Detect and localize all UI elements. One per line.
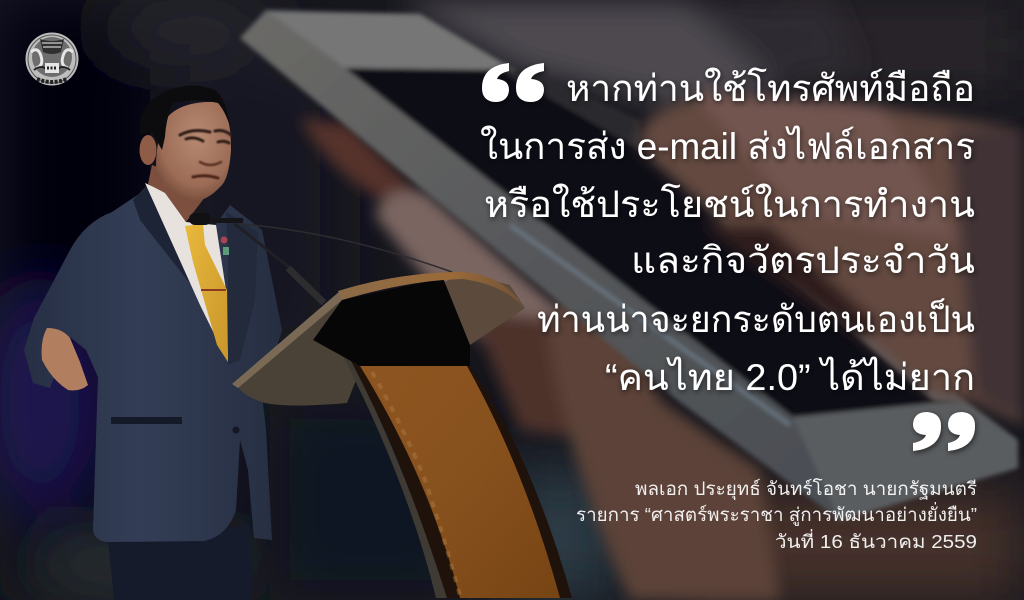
eyes, nose and mouth — [180, 130, 231, 178]
government seal logo — [26, 32, 78, 86]
tie clip — [201, 289, 226, 291]
attribution: รายการ “ศาสตร์พระราชา สู่การพัฒนาอย่างยั่งยืน” — [576, 502, 977, 526]
fingers over the phone — [640, 90, 1024, 425]
speaker figure in suit — [24, 85, 282, 600]
hand behind the phone — [300, 118, 780, 600]
smartphone — [240, 10, 1018, 520]
main quote: ท่านน่าจะยกระดับตนเองเป็น — [537, 296, 975, 340]
main quote: หรือใช้ประโยชน์ในการทำงาน — [484, 183, 975, 225]
lectern top rim — [338, 272, 525, 309]
attribution: พลเอก ประยุทธ์ จันทร์โอชา นายกรัฐมนตรี — [635, 478, 977, 501]
main quote: ในการส่ง e-mail ส่งไฟล์เอกสาร — [480, 125, 975, 167]
upper hand haze behind the phone — [395, 0, 860, 110]
left hand — [42, 328, 88, 390]
lectern black top — [313, 278, 470, 366]
attribution — [576, 478, 977, 552]
podium column — [325, 322, 572, 598]
hair — [140, 85, 231, 150]
yellow striped tie — [185, 224, 228, 362]
main quote: หากท่านใช้โทรศัพท์มือถือ — [566, 67, 975, 109]
lectern left rim — [232, 291, 342, 388]
attribution: วันที่ 16 ธันวาคม 2559 — [775, 529, 977, 552]
column wood panel — [360, 366, 560, 598]
lapel pins — [220, 236, 229, 255]
wooden podium — [232, 272, 572, 598]
carved ornament — [372, 372, 460, 596]
neck — [148, 165, 205, 222]
suit jacket — [24, 190, 282, 542]
microphones — [189, 213, 452, 303]
column grey edge — [325, 322, 447, 598]
shirt — [145, 183, 228, 362]
closing quotation mark — [913, 412, 975, 451]
trousers — [108, 525, 252, 600]
face — [156, 102, 231, 201]
lectern top right wing — [443, 273, 525, 345]
ear — [140, 135, 156, 165]
main quote: และกิจวัตรประจำวัน — [631, 240, 975, 281]
main quote: “คนไทย 2.0” ได้ไม่ยาก — [605, 356, 975, 398]
opening quotation mark — [482, 63, 544, 102]
suit details: lapel, pocket and button — [111, 186, 258, 434]
podium underside bowl — [238, 295, 360, 406]
main quote — [480, 67, 975, 398]
